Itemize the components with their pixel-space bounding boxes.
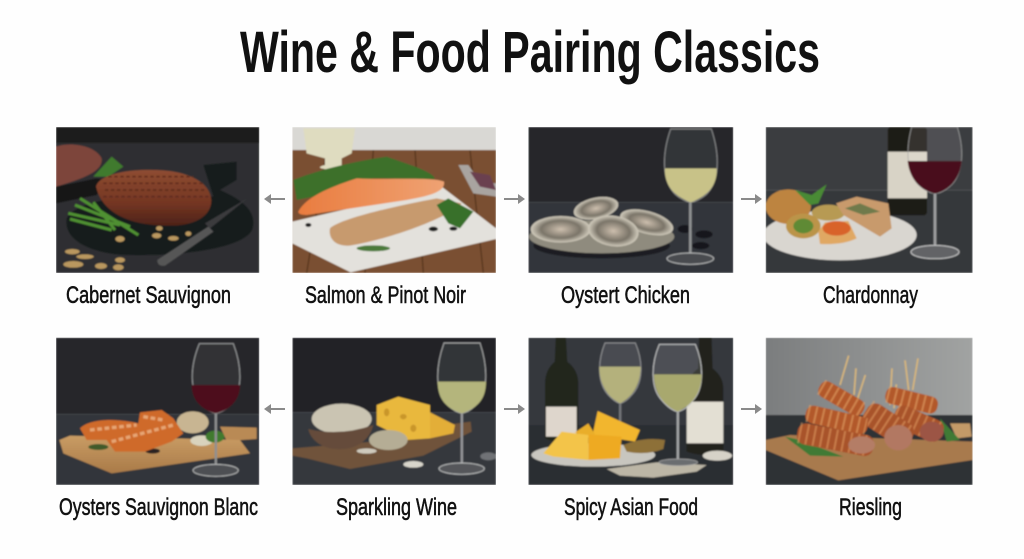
marble plate: [763, 210, 917, 260]
rice scatter: [607, 451, 732, 478]
label: Oystert Chicken: Oystert Chicken: [561, 282, 690, 309]
plate: [533, 244, 670, 258]
herbs: [68, 198, 138, 235]
cutting board: [766, 435, 973, 480]
roll: front left: [795, 422, 875, 458]
label: Oysters Sauvignon Blanc: Oysters Sauvignon Blanc: [59, 494, 258, 521]
white fish: [330, 198, 462, 246]
label: Spicy Asian Food: Spicy Asian Food: [564, 494, 698, 521]
arrow: row 2 left: [264, 404, 285, 414]
greens: [293, 157, 435, 200]
glass: [303, 128, 355, 170]
label: Cabernet Sauvignon: Cabernet Sauvignon: [66, 282, 231, 309]
wine glass: [908, 127, 962, 259]
middle glass: [599, 343, 641, 422]
steak: [96, 170, 211, 226]
wine glass: [664, 129, 717, 264]
front wine glass: [653, 344, 702, 466]
roll: top left: [816, 379, 867, 419]
panel: Spicy Asian Food: [528, 338, 733, 485]
arrow: row 2 middle: [504, 404, 525, 414]
olive wood board: [292, 422, 472, 469]
cutting board: [220, 427, 257, 441]
herb sprig: [437, 198, 473, 228]
sandwich: [836, 197, 892, 237]
panel: Riesling: [766, 338, 973, 485]
lettuce: [785, 437, 843, 457]
arrow: row 2 right: [741, 404, 762, 414]
arrow: row 1 middle: [504, 194, 525, 204]
marble plate: [292, 187, 496, 272]
knife: [205, 202, 242, 228]
side meat and tray: [56, 178, 101, 204]
chopped vegetables: [190, 435, 213, 446]
roll: top right: [884, 385, 940, 415]
table: [766, 415, 973, 485]
left bottle: [545, 338, 578, 442]
bowl with oyster: [312, 404, 372, 434]
wall: [292, 127, 496, 150]
bread puff: [766, 189, 811, 224]
crumbs: [63, 226, 191, 270]
roll: centre: [859, 400, 918, 450]
panel: Cabernet Sauvignon: [56, 127, 259, 273]
green herb: [795, 184, 827, 205]
roll: middle left: [804, 404, 870, 436]
panel: Oysters Sauvignon Blanc: [56, 338, 259, 485]
label: Riesling: Riesling: [839, 494, 902, 521]
background: [528, 338, 733, 425]
roll: back right: [890, 403, 947, 445]
panel: Sparkling Wine: [292, 338, 496, 485]
table: [766, 190, 973, 273]
sticks: [840, 356, 918, 408]
wine glass: [438, 343, 486, 474]
background: [528, 127, 733, 202]
background: [56, 338, 259, 414]
table: [528, 202, 733, 273]
slate board: [66, 162, 253, 255]
panel: Oystert Chicken: [528, 127, 733, 273]
label: Sparkling Wine: Sparkling Wine: [336, 494, 457, 521]
label: Salmon & Pinot Noir: Salmon & Pinot Noir: [305, 282, 466, 309]
bread: [177, 411, 209, 433]
plate: [531, 443, 655, 467]
fork: [458, 165, 496, 197]
table: [56, 414, 259, 485]
right bottle: [687, 338, 723, 455]
arrow: row 1 right: [741, 194, 762, 204]
crumbled pieces: [369, 430, 408, 450]
background: [292, 338, 496, 412]
arrow: row 1 left: [264, 194, 285, 204]
panel: Salmon & Pinot Noir: [292, 127, 496, 273]
panel: Chardonnay: [763, 127, 973, 273]
wine glass: [192, 344, 240, 476]
cheese: [377, 397, 430, 440]
background: [766, 338, 973, 415]
table: [528, 425, 733, 485]
salmon: [298, 178, 444, 215]
label: Chardonnay: Chardonnay: [823, 282, 918, 309]
seafood rolls: [80, 410, 183, 452]
background: [766, 127, 973, 190]
wood table: [292, 127, 496, 273]
oysters: [531, 193, 676, 250]
pebbles: [678, 224, 688, 234]
bottle: [888, 127, 927, 215]
table: [292, 412, 496, 485]
small pastries: [812, 205, 845, 221]
photo background: [56, 127, 259, 273]
cheese: [593, 411, 640, 442]
